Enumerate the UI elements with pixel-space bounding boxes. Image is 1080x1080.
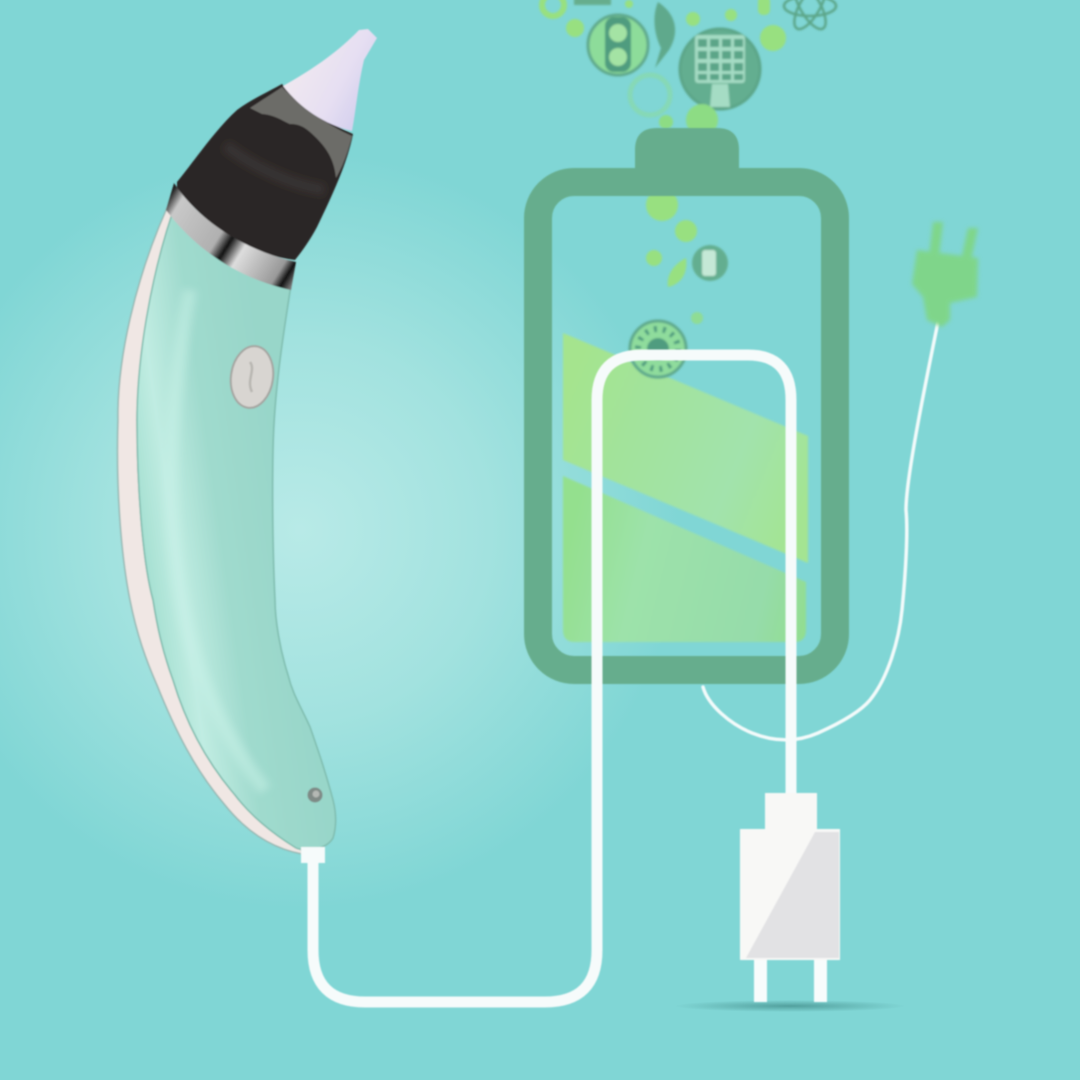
- device silver ring: [166, 183, 296, 290]
- charger: [740, 793, 840, 1002]
- icon: atom: [784, 0, 836, 34]
- icon: small fuel badge: [692, 245, 728, 281]
- icon: green wall plug: [912, 222, 978, 327]
- battery fill: upper charge level: [563, 333, 808, 563]
- device nozzle tip: [283, 29, 377, 131]
- battery outline: [538, 128, 835, 670]
- nasal aspirator device: [118, 29, 377, 863]
- device highlight: [171, 290, 265, 790]
- device cable strain relief: [301, 847, 325, 863]
- device power button: [227, 343, 277, 411]
- icon: energy icons rising into battery: [542, 0, 836, 324]
- device head interior shading: [225, 145, 325, 190]
- icon: leaf: [654, 2, 675, 68]
- thin white cable to wall plug: [703, 322, 938, 740]
- icon: solar panel: [680, 29, 760, 109]
- device indicator light: [308, 788, 322, 802]
- device dark head: [177, 84, 353, 260]
- icon: sun badge: [630, 321, 686, 377]
- white charging cable: [313, 355, 791, 1002]
- device body: [137, 214, 336, 850]
- device back white strip: [118, 208, 302, 854]
- shadow under charger: [675, 1000, 905, 1012]
- battery fill: lower charge level: [563, 476, 806, 642]
- icon: socket: [588, 15, 648, 75]
- device head translucent shoulder: [250, 87, 352, 178]
